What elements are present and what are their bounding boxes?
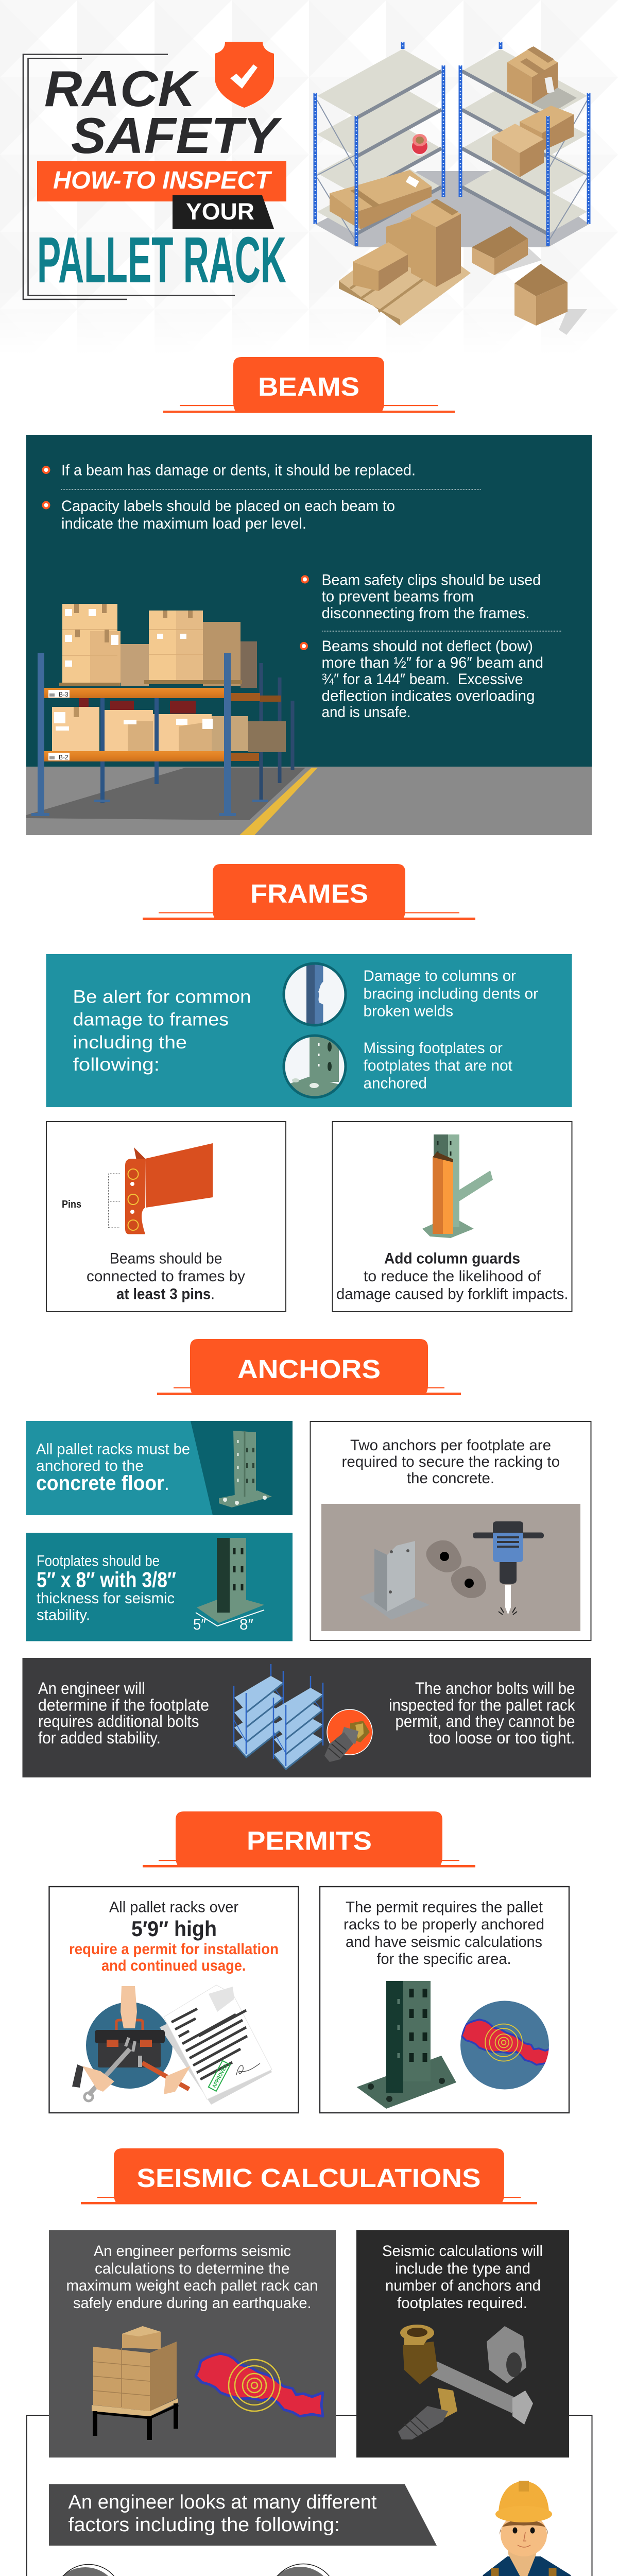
caption: connected to frames by (87, 1268, 245, 1285)
section header: anchors (157, 1339, 461, 1395)
document (160, 1985, 272, 2105)
icon: shield with check (215, 42, 274, 108)
text (342, 1437, 560, 1487)
bullet: capacity labels: indicate the maximum load per level. (61, 515, 306, 532)
suspenders (495, 2568, 553, 2576)
text: An engineer performs seismic (94, 2243, 291, 2260)
section header: seismic calculations (81, 2148, 537, 2204)
text: thickness for seismic (37, 1590, 175, 1607)
title block (23, 42, 286, 299)
text (66, 2243, 318, 2312)
beam tag B-3: B-3 (59, 691, 68, 698)
subtitle band (37, 161, 286, 201)
caption: to reduce the likelihood of (364, 1268, 541, 1285)
hard hat (499, 2481, 549, 2514)
hands and wrenches (72, 1986, 191, 2101)
floor shadow (315, 171, 589, 247)
title: SAFETY: SAFETY (71, 107, 282, 164)
panel: engineer and anchor bolts (23, 1658, 591, 1777)
text: safely endure during an earthquake. (73, 2295, 311, 2312)
footplate text: anchored (364, 1075, 427, 1092)
card: two anchors per footplate (310, 1421, 591, 1640)
callout: pins: Pins (62, 1199, 81, 1210)
intro text: following: (73, 1055, 160, 1075)
open cardboard box (472, 226, 528, 275)
panel: common frame damage (46, 954, 572, 1107)
icon: seismic map (196, 2353, 323, 2416)
upper beam (224, 693, 260, 701)
your tag (173, 195, 274, 229)
intro text: damage to frames (73, 1010, 229, 1029)
card: column guards (333, 1122, 572, 1312)
bullet: deflection: deflection indicates overloading (321, 687, 535, 705)
bullet: deflection: more than ½″ for a 96″ beam and (321, 654, 543, 671)
neck (508, 2548, 536, 2576)
right text: inspected for the pallet rack (389, 1696, 575, 1715)
bullet: safety clips: disconnecting from the frames. (321, 605, 529, 622)
text: require a permit for installation (69, 1941, 279, 1958)
heading: engineer factors (49, 2484, 437, 2546)
beam tag B-3 (48, 690, 70, 698)
text: maximum weight each pallet rack can (66, 2277, 318, 2294)
right text: permit, and they cannot be (396, 1712, 575, 1731)
card: beam pins (46, 1122, 286, 1312)
text: 5″ x 8″ with 3/8″ (37, 1567, 176, 1592)
face (501, 2513, 547, 2556)
subtitle: your: YOUR (186, 198, 254, 225)
upper boxes (248, 721, 286, 752)
caption: Beams should be (110, 1250, 222, 1267)
inner posts (102, 698, 157, 803)
right text (389, 1679, 575, 1747)
damage text: bracing including dents or (364, 985, 538, 1003)
illustration: pallet of boxes (92, 2326, 178, 2440)
middle box (520, 106, 574, 133)
section header: frames: FRAMES (250, 879, 368, 908)
text: footplates required. (397, 2295, 527, 2312)
icon: footplate with dimensions: 8″ (239, 1616, 253, 1633)
left text: determine if the footplate (38, 1696, 209, 1715)
text: All pallet racks must be (36, 1440, 190, 1458)
lower beam (224, 753, 259, 761)
text (382, 2243, 543, 2312)
bullet: safety clips: Beam safety clips should be used (321, 572, 541, 588)
front posts (38, 653, 44, 815)
right text: too loose or too tight. (428, 1728, 575, 1747)
callout: pins (62, 1174, 120, 1228)
card: permit requirement (49, 1887, 299, 2113)
bullet: safety clips (302, 572, 541, 622)
text: Two anchors per footplate are (350, 1437, 551, 1454)
bullet: safety clips: to prevent beams from (321, 588, 474, 605)
panel: seismic weight (49, 2230, 336, 2458)
title frame lines (23, 55, 235, 299)
lower boxes (212, 716, 248, 751)
text: Seismic calculations will (382, 2243, 543, 2260)
illustration: engineer worker (457, 2481, 587, 2576)
shirt (471, 2556, 577, 2576)
shadows (479, 247, 542, 275)
bullet: deflection: and is unsafe. (321, 704, 411, 721)
bullet: deflection: ¾″ for a 144″ beam. Excessive (321, 671, 523, 688)
title: pallet rack: PALLET RACK (37, 224, 286, 296)
factor: thickness of concrete floor (266, 2564, 452, 2576)
footplate text: footplates that are not (364, 1057, 513, 1074)
box on top shelf (507, 47, 558, 77)
bullet: deflection: Beams should not deflect (bow) (321, 638, 533, 655)
illustration: tools and approved document (72, 1985, 272, 2105)
panel: footplate size (26, 1533, 293, 1641)
section header: beams (163, 357, 455, 413)
icon: footplate with dimensions (193, 1538, 264, 1633)
text: All pallet racks over (109, 1899, 238, 1916)
text: stability. (37, 1606, 90, 1624)
text (344, 1899, 544, 1968)
illustration: loaded pallet rack (26, 604, 592, 835)
text (37, 1553, 176, 1624)
intro text (73, 987, 251, 1075)
damage text (364, 968, 538, 1020)
toolbox (95, 2020, 165, 2067)
tape roll (412, 134, 427, 156)
back rack posts (261, 663, 293, 802)
open box on shelf (492, 124, 544, 153)
text: and have seismic calculations (346, 1934, 542, 1951)
icon: footplate with dimensions: 5″ (193, 1616, 206, 1633)
factor: type of material (50, 2565, 242, 2576)
approved stamp: APPROVED (211, 2063, 229, 2089)
footplate text: Missing footplates or (364, 1040, 503, 1057)
caption: damage caused by forklift impacts. (336, 1286, 569, 1302)
caption: at least 3 pins. (116, 1286, 215, 1302)
text: for the specific area. (377, 1951, 511, 1968)
text: and continued usage. (101, 1957, 246, 1974)
bullet: capacity labels (43, 498, 395, 532)
section header: seismic calculations: SEISMIC CALCULATIONS (137, 2163, 481, 2193)
icon: beam connector (125, 1143, 213, 1234)
anchor holes (426, 1540, 486, 1598)
text: Footplates should be (37, 1553, 160, 1569)
panel: concrete floor (26, 1421, 293, 1515)
text: The permit requires the pallet (346, 1899, 543, 1916)
icon: anchor bolt badge (324, 1709, 372, 1762)
caption: Add column guards (384, 1250, 520, 1267)
heading: engineer factors: factors including the following: (68, 2514, 340, 2536)
intro text: including the (73, 1032, 187, 1053)
text: 5′9″ high (131, 1917, 217, 1941)
left rack (315, 42, 443, 246)
text (36, 1440, 190, 1495)
left text: for added stability. (38, 1728, 161, 1747)
title: RACK: RACK (44, 60, 199, 117)
illustration: bolts and nuts (398, 2325, 533, 2439)
open cardboard box 2 (514, 264, 568, 326)
right text: The anchor bolts will be (415, 1679, 575, 1698)
text: number of anchors and (385, 2277, 541, 2294)
text: include the type and (395, 2260, 530, 2277)
panel: beams (26, 435, 592, 835)
footplate text (364, 1040, 513, 1092)
heading: engineer factors: An engineer looks at many different (68, 2492, 377, 2513)
frame: engineer factors (27, 2230, 592, 2576)
text: anchored to the (36, 1458, 144, 1475)
text: concrete floor. (36, 1472, 169, 1495)
decorative background (0, 0, 618, 355)
text: required to secure the racking to (342, 1453, 560, 1470)
section header: anchors: ANCHORS (237, 1354, 381, 1384)
panel: anchors and footplates (356, 2230, 569, 2458)
caption (336, 1250, 569, 1302)
icon: silver footplate (359, 1541, 430, 1620)
left text: An engineer will (38, 1679, 145, 1698)
icon: missing footplate (282, 1035, 347, 1098)
right rack (460, 42, 589, 246)
bullet: damage: If a beam has damage or dents, it should be replaced. (61, 462, 416, 479)
text (69, 1899, 279, 1974)
left text (38, 1679, 209, 1747)
beam tag B-2: B-2 (59, 754, 68, 761)
icon: upright with footplate (219, 1431, 272, 1507)
icon: column with guard (422, 1134, 493, 1238)
text: calculations to determine the (95, 2260, 289, 2277)
section header: permits: PERMITS (247, 1826, 372, 1856)
damage text: Damage to columns or (364, 968, 516, 985)
text: racks to be properly anchored (344, 1916, 544, 1933)
card: anchored rack in seismic area (320, 1887, 569, 2113)
damage text: broken welds (364, 1003, 453, 1020)
section header: frames (143, 864, 475, 920)
icon: column on footplate (356, 1981, 456, 2109)
bullet: capacity labels: Capacity labels should be placed on each beam to (61, 498, 395, 515)
icon: seismic map (460, 2001, 553, 2090)
illustration: concrete with anchor holes (321, 1504, 580, 1631)
icon: jackhammer (473, 1521, 544, 1615)
left text: requires additional bolts (38, 1712, 199, 1731)
subtitle: how-to inspect: HOW-TO INSPECT (53, 167, 272, 194)
section header: beams: BEAMS (258, 372, 359, 401)
icon: racks (234, 1664, 323, 1770)
long box on shelf (330, 170, 432, 212)
icon: damaged column (284, 958, 346, 1030)
beam tag B-2 (48, 753, 70, 761)
pallet with boxes (339, 199, 471, 326)
bullet: deflection (301, 638, 543, 721)
text: the concrete. (407, 1470, 494, 1487)
section header: permits (143, 1811, 475, 1867)
intro text: Be alert for common (73, 987, 251, 1007)
caption (87, 1250, 245, 1302)
illustration: warehouse racks and boxes (315, 42, 589, 335)
warehouse floor (26, 767, 592, 835)
